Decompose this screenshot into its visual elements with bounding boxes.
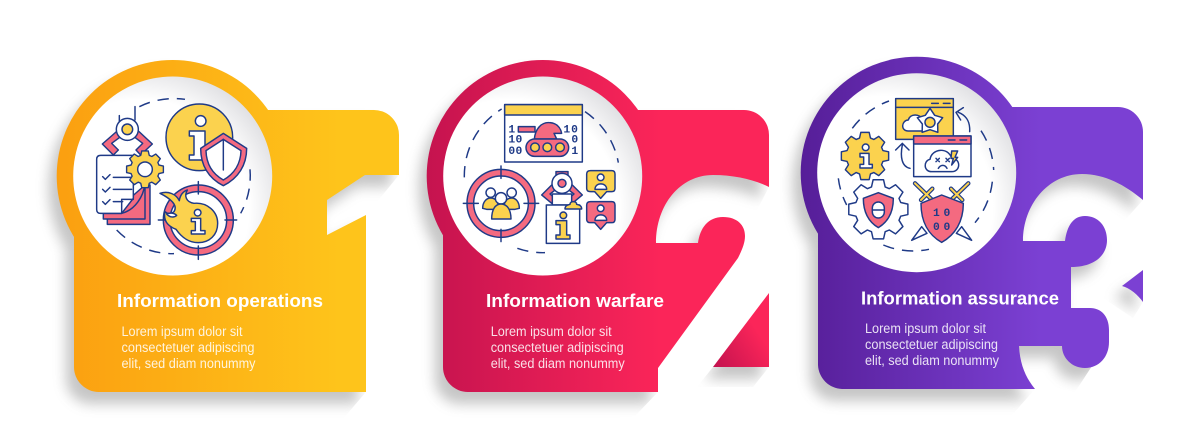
icon: info circle (166, 104, 233, 171)
icon: tank window: 10 (563, 125, 578, 137)
body text: consectetuer adipiscing (122, 340, 254, 355)
icon group: warfare (463, 105, 618, 253)
icon: info gear (841, 132, 889, 180)
body text: Lorem ipsum dolor sit (491, 324, 612, 339)
red card with numeral 2 cut-out (427, 60, 769, 392)
icon: security gear (849, 180, 908, 239)
body text: elit, sed diam nonummy (491, 356, 625, 371)
icon: checklist (97, 155, 150, 224)
icon: burning target (158, 182, 237, 259)
body text: consectetuer adipiscing (491, 340, 624, 355)
icon: tank window: 1 (508, 125, 515, 137)
purple card with numeral 3 cut-out (801, 57, 1143, 389)
icon: shield (201, 133, 247, 186)
body text (491, 324, 625, 371)
icon: crossed swords shield: 00 (933, 222, 951, 234)
icon: yellow profile bubble (587, 171, 615, 198)
icon: robot arm with info card (542, 172, 582, 243)
icon: gear (127, 151, 163, 188)
body text: elit, sed diam nonummy (865, 353, 999, 368)
icon: tank window: 00 (508, 146, 523, 158)
white icon circle (817, 73, 1016, 272)
heading: Information assurance (861, 288, 1059, 308)
icon: crossed swords shield (912, 183, 972, 242)
icon: broken cloud window (914, 136, 971, 177)
panel: information warfare (419, 60, 769, 404)
icon: tank window: 0 (571, 135, 578, 147)
icon: tank window: 10 (508, 135, 523, 147)
heading: Information operations (117, 290, 323, 311)
body text (865, 321, 999, 368)
yellow card with numeral 1 cut-out (57, 60, 399, 392)
white icon circle (443, 76, 642, 276)
body text: Lorem ipsum dolor sit (865, 321, 986, 336)
panel shadow (49, 72, 391, 404)
icon: pink profile bubble (587, 202, 615, 229)
body text (122, 324, 256, 371)
icon: healthy cloud window (896, 99, 953, 139)
heading: Information warfare (486, 290, 664, 311)
panel shadow (793, 69, 1135, 401)
panel: information operations (49, 60, 399, 404)
icon: cycle arrows (896, 108, 970, 168)
body text: consectetuer adipiscing (865, 337, 998, 352)
panel: information assurance (793, 57, 1143, 401)
infographic (42, 56, 1143, 410)
white icon circle (73, 76, 272, 276)
body text: elit, sed diam nonummy (122, 356, 256, 371)
icon: target with people (463, 166, 539, 242)
icon: tank window (505, 105, 582, 162)
icon: crossed swords shield: 10 (933, 208, 951, 220)
icon group: operations (97, 99, 250, 259)
body text: Lorem ipsum dolor sit (122, 324, 243, 339)
icon: tank window: 1 (571, 146, 578, 158)
icon: robotic arm (102, 107, 152, 155)
panel shadow (419, 72, 761, 404)
icon group: assurance (838, 99, 994, 251)
